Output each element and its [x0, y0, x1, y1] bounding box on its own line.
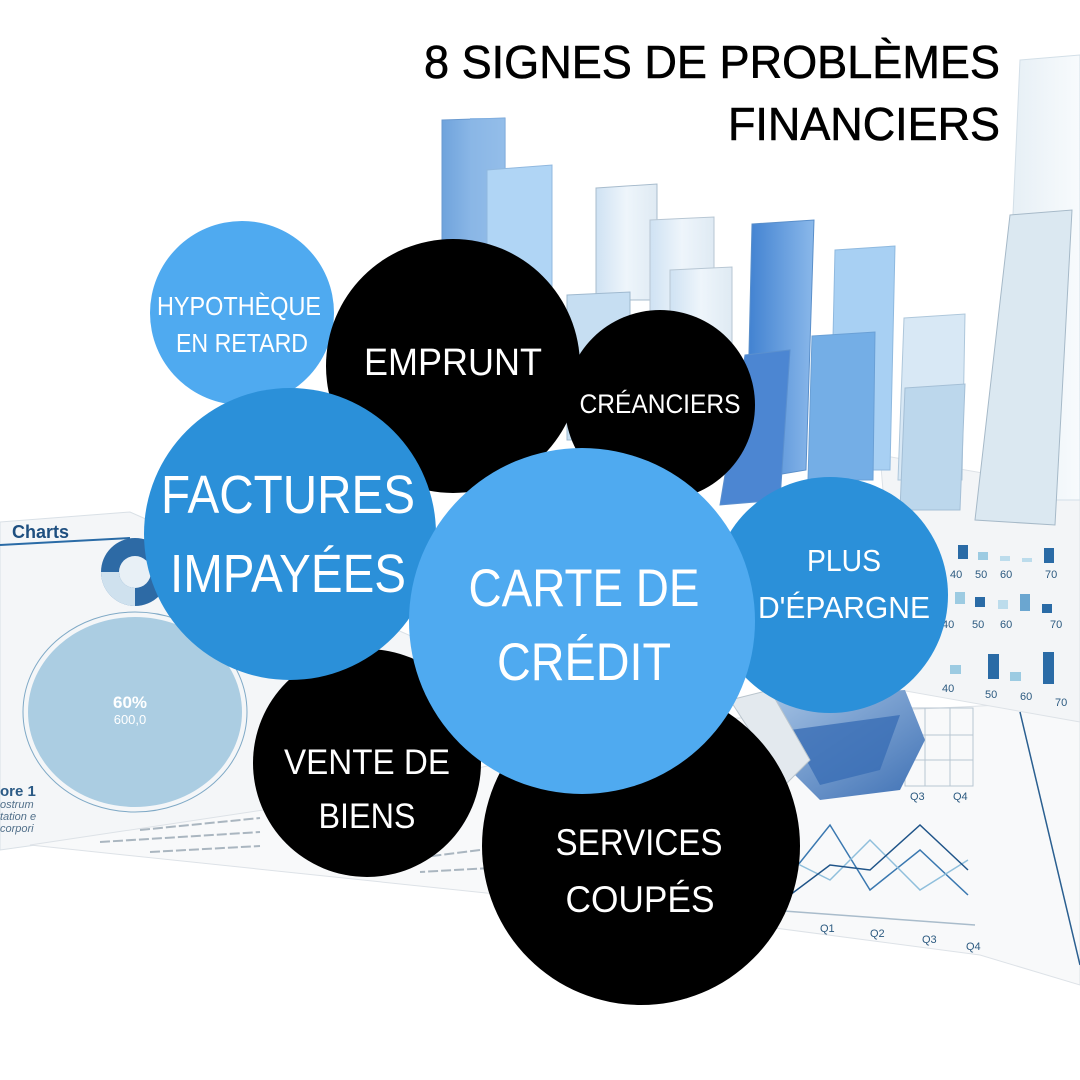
line chart axis labels: Q2 [870, 928, 885, 940]
bar 3 [596, 184, 657, 300]
bar 9 [900, 384, 965, 510]
bubble: emprunt: EMPRUNT [364, 342, 542, 384]
grid panel [905, 708, 973, 786]
bar chart axis numbers: 60 [1020, 691, 1032, 703]
bubble: hypothèque en retard [150, 221, 334, 405]
bubble: hypothèque en retard: HYPOTHÈQUE [157, 291, 321, 321]
glass cube ornament [730, 690, 925, 800]
bar chart axis numbers: 50 [985, 689, 997, 701]
title: 8 SIGNES DE PROBLÈMES [424, 36, 1000, 88]
bar 5 [746, 220, 814, 480]
bar 8 [898, 314, 965, 480]
line chart axis labels [820, 791, 981, 953]
paper caption: ostrum [0, 799, 34, 811]
pie chart 60% [23, 612, 247, 812]
bubble: services coupés: SERVICES [556, 822, 722, 863]
bar chart axis numbers: 70 [1045, 569, 1057, 581]
bar chart axis numbers: 70 [1055, 697, 1067, 709]
bar 7 [808, 332, 875, 480]
bubble: plus d'épargne: PLUS [807, 543, 881, 578]
bar chart axis numbers: 50 [972, 619, 984, 631]
line chart [770, 825, 975, 925]
bar chart axis numbers [942, 569, 1067, 709]
bar 12 dark small [720, 350, 790, 505]
line chart axis labels: Q1 [820, 923, 835, 935]
bubble: vente de biens: BIENS [318, 797, 416, 836]
bar chart axis numbers: 40 [942, 619, 954, 631]
line chart axis labels: Q4 [953, 791, 968, 803]
line chart axis labels: Q3 [910, 791, 925, 803]
bar 11 tall front [975, 210, 1072, 525]
small donut chart [101, 538, 169, 606]
bubble: vente de biens: VENTE DE [284, 743, 450, 782]
line chart axis labels: Q4 [966, 941, 981, 953]
bubble: carte de crédit: CARTE DE [468, 559, 700, 618]
bar 4b short [670, 267, 732, 400]
bubble: factures impayées: IMPAYÉES [170, 544, 406, 604]
paper caption: corpori [0, 823, 34, 835]
bar chart axis numbers: 60 [1000, 619, 1012, 631]
paper body text lines [100, 818, 490, 872]
bar 6 [830, 246, 895, 470]
pie chart 60%: 600,0 [114, 712, 146, 727]
small bar charts at right [950, 545, 1054, 684]
bar chart axis numbers: 60 [1000, 569, 1012, 581]
title [424, 36, 1000, 150]
bubble: plus d'épargne [712, 477, 948, 713]
background: financial report papers [0, 455, 1080, 985]
line chart axis labels: Q3 [922, 934, 937, 946]
bar 10 tall back [1000, 55, 1080, 500]
bubble: hypothèque en retard: EN RETARD [176, 328, 308, 358]
paper caption: tation e [0, 811, 36, 823]
bar 2 [487, 165, 552, 300]
bubble: services coupés [482, 687, 800, 1005]
bubble: vente de biens [253, 649, 481, 877]
paper caption [0, 783, 36, 835]
title: FINANCIERS [728, 98, 1000, 150]
bar chart axis numbers: 40 [942, 683, 954, 695]
bar 1 [442, 118, 505, 300]
bubble: créanciers [565, 310, 755, 500]
bubble: services coupés: COUPÉS [566, 879, 714, 920]
chart heading on paper: Charts [12, 522, 69, 542]
bar chart axis numbers: 70 [1050, 619, 1062, 631]
bar 4 [650, 217, 714, 340]
bubble: plus d'épargne: D'ÉPARGNE [758, 590, 930, 625]
bar 3b short [567, 292, 630, 440]
paper caption: ore 1 [0, 783, 36, 800]
bubble: carte de crédit: CRÉDIT [497, 633, 671, 692]
bubble: carte de crédit [409, 448, 755, 794]
glass bar chart [442, 55, 1080, 525]
bar chart axis numbers: 40 [950, 569, 962, 581]
bar chart axis numbers: 50 [975, 569, 987, 581]
bubble: emprunt [326, 239, 580, 493]
bubble: factures impayées [144, 388, 436, 680]
bubble: créanciers: CRÉANCIERS [580, 389, 740, 419]
pie chart 60%: 60% [113, 693, 147, 712]
bubble: factures impayées: FACTURES [161, 465, 415, 525]
